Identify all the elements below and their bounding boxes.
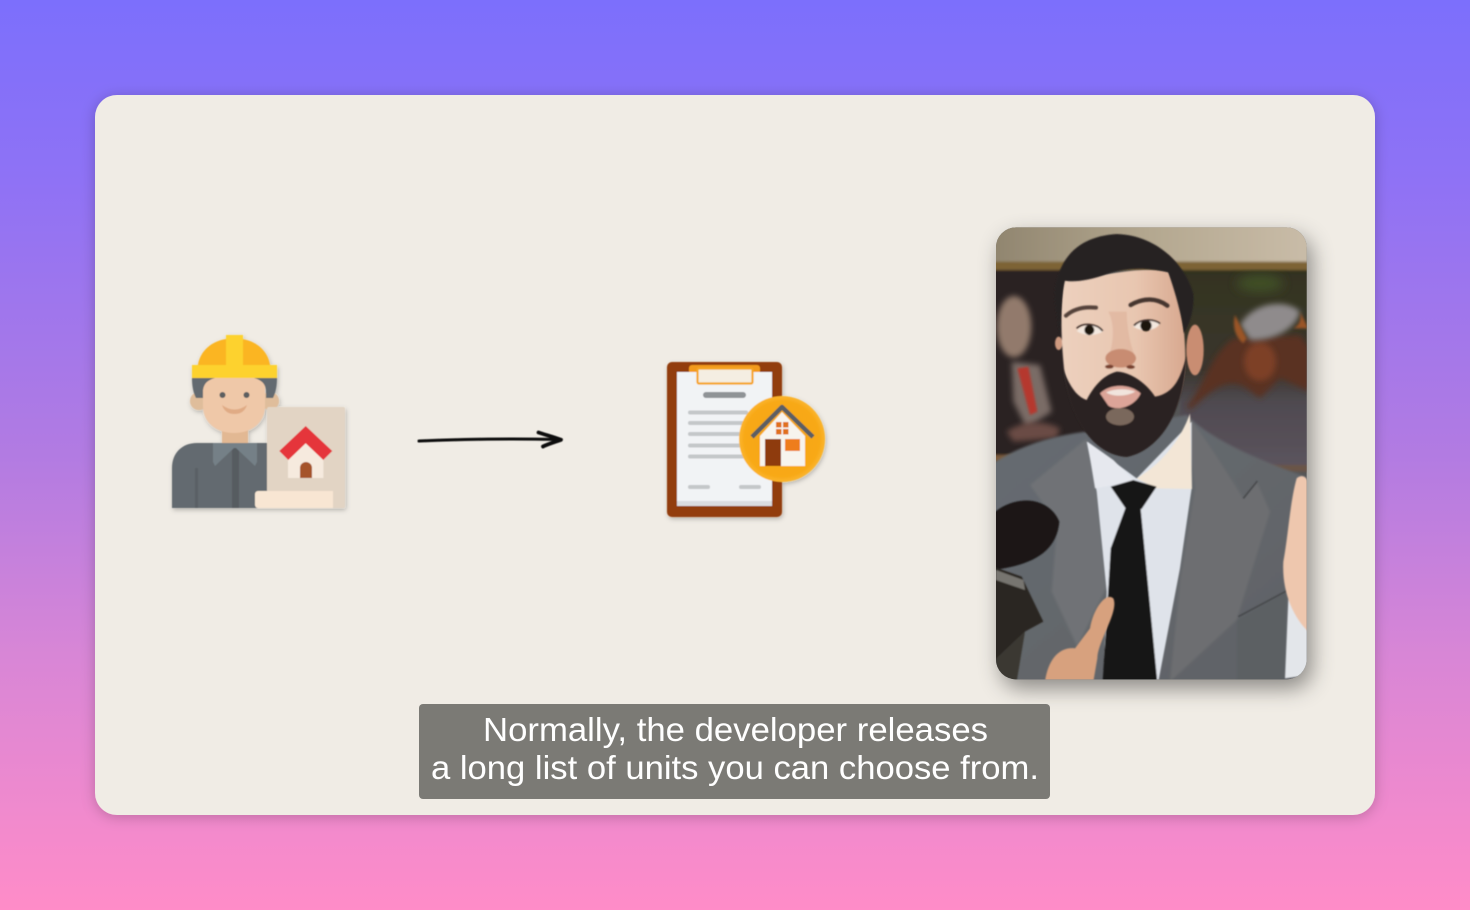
suit [993,415,1310,682]
infographic scene [88,90,1382,824]
eyes and brows [1066,300,1167,335]
caption text: a long list of units you can choose from. [431,749,1039,786]
blurred portrait painting [997,296,1060,442]
hands [1045,476,1310,682]
microphone [993,500,1059,682]
blurred bull painting [1187,275,1310,410]
caption text: Normally, the developer releases [483,711,988,748]
photo: presenter speaking [993,225,1310,682]
house plan paper [255,407,345,508]
suit pocket and notch lines [1238,481,1288,617]
shirt and tie [1087,413,1192,682]
caption background [419,704,1050,799]
icon: clipboard listing with house badge [667,362,825,517]
head [1054,269,1205,402]
caption [419,704,1050,799]
house badge [739,396,825,482]
beard and mouth [1063,357,1186,457]
panel: main card [95,95,1375,815]
arrow [419,432,561,446]
background wall and paintings [993,225,1310,472]
icon: construction developer with house plan [172,335,345,508]
hair [1054,234,1194,337]
worker figure [172,335,279,508]
clipboard [667,362,782,517]
